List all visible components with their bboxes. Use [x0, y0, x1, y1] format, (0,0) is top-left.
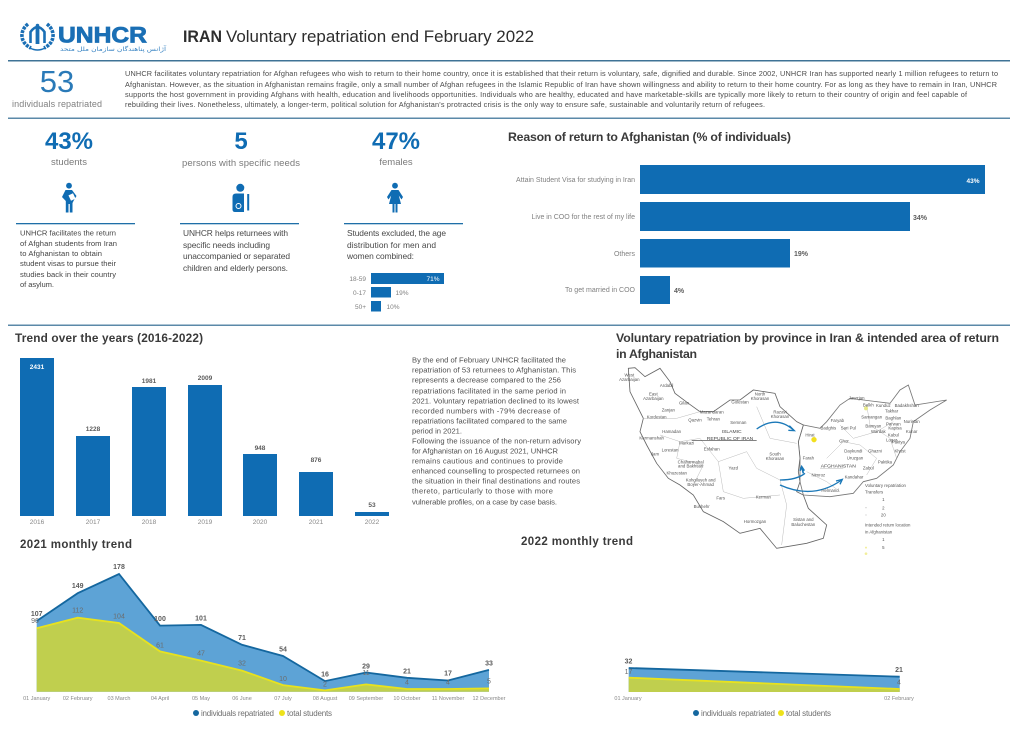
area chart: 2021 monthly trend: 04 April [151, 696, 169, 702]
bar chart: trend 2016-2022: 2020 [253, 519, 268, 526]
bar chart: trend 2016-2022: 1228 [86, 426, 101, 433]
map: province labels: Badakhshan [895, 403, 919, 408]
map: province labels: Nuristan [904, 419, 920, 424]
bar chart: trend 2016-2022: 2017 [86, 519, 101, 526]
stat: 43% students: students [51, 157, 87, 168]
area chart: 2021 monthly trend: 54 [279, 646, 287, 654]
map: province labels: Kordestan [647, 415, 667, 420]
bar chart: reason of return: 43% [966, 178, 980, 185]
heading: trend over the years: Trend over the years (2016-2022) [15, 331, 203, 345]
text: students description: to Afghanistan to obtain [20, 249, 102, 258]
heading: map: in Afghanistan [616, 347, 697, 361]
text block: trend narrative: recorded numbers with -79% decrease of [412, 406, 561, 416]
area chart: 2021 monthly trend: 33 [485, 660, 493, 668]
map: country labels: REPUBLIC OF IRAN [707, 436, 754, 442]
map: province labels: Takhar [885, 408, 899, 413]
area chart: 2021 monthly trend: 07 July [274, 696, 292, 702]
text: students description: student visas to pursue their [20, 259, 116, 268]
map: province labels: Farah [803, 456, 815, 461]
map: province labels: West [624, 373, 635, 378]
area chart: 2022 monthly trend: 21 [895, 667, 903, 674]
bar chart: reason of return [516, 165, 985, 304]
area chart: 2021 monthly trend: 11 November [432, 696, 464, 702]
map: province labels: Badghis [821, 426, 836, 431]
bar chart: age distribution: 18-59 [349, 276, 366, 283]
map: country labels: ISLAMIC [722, 429, 742, 435]
text: students description: UNHCR facilitates the return [20, 228, 116, 238]
text: age distribution intro: distribution for men and [347, 240, 436, 250]
intro paragraph: Afghanistan. However, as the situation in Afghanistan remains fragile, only a small number of Afghan refugees in the Islamic Republic of Iran have shown willingness and ability to return to their home country. For as long as they have to remain in Iran, UNHCR [125, 80, 997, 89]
map legend: 1 [882, 497, 885, 502]
headline figure: individuals repatriated: 53 [40, 64, 74, 99]
bar chart: reason of return: 4% [674, 288, 685, 295]
area chart: 2021 monthly trend: 32 [238, 660, 246, 668]
bar chart: age distribution: 19% [395, 290, 409, 297]
text block: trend narrative: repatriation of 53 returnees to Afghanistan. This [412, 366, 576, 374]
map: province labels: Logar [886, 438, 898, 443]
bar chart: reason of return: Attain Student Visa for studying in Iran [516, 177, 635, 184]
area chart: 2021 monthly trend: 21 [403, 668, 411, 676]
map: province labels [619, 373, 920, 527]
map: province labels: Parwan [886, 422, 901, 427]
area chart: 2021 monthly trend: 02 February [63, 696, 93, 702]
area chart: 2021 monthly trend: 149 [72, 583, 84, 590]
text block: trend narrative: enhanced counselling to prospected returnees on [412, 466, 580, 476]
bar chart: age distribution: 10% [386, 304, 400, 311]
text: specific needs description [183, 228, 290, 273]
text block: trend narrative: Following the issuance of the non-return advisory [412, 436, 581, 446]
map: province labels: Hormozgan [744, 519, 767, 524]
stat: 43% students [45, 128, 93, 168]
title: Voluntary repatriation end February 2022 [226, 27, 534, 46]
map: province labels: Sistan and [793, 517, 814, 522]
map: province labels: Kerman [756, 495, 772, 500]
panel: persons with specific needs [180, 128, 300, 273]
map: province labels: Esfahan [704, 446, 720, 451]
text block: trend narrative: repatriations facilitated compared to the same [412, 416, 567, 426]
map: country labels: AFGHANISTAN [821, 464, 856, 470]
map: province labels: Kunar [906, 429, 918, 434]
area chart: 2021 monthly trend: 03 March [108, 696, 130, 702]
area chart: 2021 monthly trend: 10 [279, 676, 287, 683]
map: province labels: Sari Pul [841, 426, 856, 431]
area chart: 2021 monthly trend: 16 [321, 672, 329, 678]
map: province labels: Khost [894, 448, 906, 453]
text block: trend narrative: represents a decrease compared to the 256 [412, 376, 561, 384]
stat: 5 persons with specific needs: persons with specific needs [182, 158, 300, 169]
bar chart: age distribution: 50+ [355, 304, 366, 311]
map: province labels: Helmand [821, 488, 839, 493]
map: province labels: Paktya [892, 440, 906, 445]
text block: trend narrative: 2021. Voluntary repatriation declined to its lowest [412, 396, 580, 406]
bar chart: trend 2016-2022 [20, 358, 389, 526]
area chart: 2022 monthly trend: 02 February [884, 696, 914, 702]
bar chart: trend 2016-2022: 2018 [142, 519, 157, 526]
heading: reason of return: Reason of return to Afghanistan (% of individuals) [508, 130, 791, 144]
map: province boundaries [643, 405, 897, 545]
headline figure: individuals repatriated [12, 64, 102, 109]
map: province labels: Wardak [871, 429, 887, 434]
map legend: Transfers [865, 490, 883, 495]
map legend: 2 [882, 505, 885, 510]
map: province labels: South [769, 452, 781, 457]
area chart: 2021 monthly trend: 05 May [192, 696, 210, 702]
map: province labels: Boyer-Ahmad [687, 482, 714, 487]
map: province labels: North [755, 392, 766, 397]
panel: females [344, 128, 463, 312]
map legend: Voluntary repatriation [865, 483, 906, 488]
legend: 2022 chart: total students [786, 709, 831, 718]
bar chart: trend 2016-2022: 948 [255, 445, 266, 452]
bar chart: trend 2016-2022: 2021 [309, 519, 324, 526]
area chart: 2021 monthly trend: 112 [72, 608, 83, 614]
bar chart: age distribution [349, 273, 444, 312]
text block: trend narrative: for Afghanistan on 16 August 2021, UNHCR [412, 446, 559, 456]
bar chart: trend 2016-2022: 1981 [142, 378, 157, 385]
map: province labels: Bamyan [865, 423, 882, 428]
area chart: 2021 monthly trend [23, 564, 506, 718]
bar chart: trend 2016-2022: 2431 [30, 364, 45, 371]
map: province labels: Mazandaran [700, 410, 724, 415]
map: province labels: Golestan [731, 400, 749, 405]
icon: UNHCR emblem [22, 24, 53, 50]
area chart: 2021 monthly trend: 5 [487, 678, 491, 686]
map: province labels: Kunduz [876, 403, 891, 408]
map: province labels: Zanjan [662, 407, 676, 412]
area chart: 2021 monthly trend: 96 [31, 618, 39, 625]
map: province labels: Tehran [707, 417, 721, 422]
map: country labels [707, 429, 856, 470]
bar chart: age distribution: 71% [426, 276, 440, 283]
area chart: 2022 monthly trend: 01 January [614, 696, 642, 702]
bar chart: reason of return: 34% [913, 215, 928, 222]
text block: trend narrative: repatriations facilitated in the same period in [412, 386, 566, 396]
bar chart: trend 2016-2022: 876 [311, 457, 322, 464]
intro paragraph: supports the host government in providing Afghans with health, education and livelihoods opportunities. Individuals who are healthy, educated and have marketable-skills are typically more likely to return to their country of origin and feel capable of [125, 90, 968, 99]
area chart: 2021 monthly trend: 06 June [232, 696, 252, 702]
bar chart: reason of return: To get married in COO [565, 287, 636, 294]
text: age distribution intro [346, 228, 446, 261]
map: province labels: Kabul [888, 432, 899, 437]
map: Iran outline [628, 368, 827, 548]
text: specific needs description: unaccompanied or separated [183, 251, 290, 261]
stat: 5 persons with specific needs [182, 128, 300, 169]
area chart: 2021 monthly trend: 29 [362, 664, 370, 670]
icon: female figure [387, 183, 403, 212]
map: province labels: Chaharmahal [678, 459, 704, 464]
map legend: 20 [881, 513, 886, 518]
area chart: 2021 monthly trend: 10 October [393, 696, 421, 702]
icon: person with specific needs [232, 184, 249, 212]
map: province labels: Daykundi [844, 448, 862, 453]
map: province labels: Azarbaijan [619, 377, 640, 382]
text: specific needs description: UNHCR helps returnees with [183, 228, 288, 238]
stat: 47% females: 47% [372, 128, 420, 155]
text block: trend narrative: vulnerable profiles, on a case by case basis. [412, 498, 557, 506]
area chart: 2022 monthly trend [614, 658, 914, 718]
legend: 2021 chart [193, 709, 332, 718]
text block: trend narrative: remains cautious and continues to provide [412, 456, 563, 466]
map legend [865, 483, 911, 555]
area chart: 2021 monthly trend: 47 [197, 650, 205, 658]
text block: trend narrative: period in 2021. [412, 426, 462, 436]
bar chart: reason of return: Live in COO for the rest of my life [532, 214, 635, 221]
area chart: 2021 monthly trend: 4 [405, 680, 409, 686]
map: province labels: Paktika [878, 460, 893, 465]
map: province labels: Gilan [679, 401, 690, 406]
area chart: 2021 monthly trend: 61 [156, 642, 164, 650]
map: province labels: Semnan [730, 420, 747, 425]
area chart: 2021 monthly trend: 08 August [313, 696, 338, 702]
heading: map [616, 331, 999, 361]
map: province labels: Khorasan [771, 414, 790, 419]
map legend: in Afghanistan [865, 530, 893, 535]
map: province labels: and Bakhtiari [678, 464, 703, 469]
map: province labels: Samangan [861, 415, 883, 420]
map: province labels: Fars [716, 496, 725, 501]
map: province labels: Zabul [863, 466, 874, 471]
stat: 47% females: females [379, 157, 413, 168]
bar chart: trend 2016-2022: 53 [368, 502, 376, 509]
map: province labels: Faryab [831, 418, 845, 423]
stat: 5 persons with specific needs: 5 [234, 128, 248, 155]
map: province labels: Baghlan [885, 416, 902, 421]
map legend: 5 [882, 545, 885, 550]
text block: trend narrative: By the end of February UNHCR facilitated the [412, 356, 566, 364]
map legend: Intended return location [865, 522, 911, 527]
map: province labels: Azarbaijan [643, 396, 664, 401]
area chart: 2021 monthly trend: 01 January [23, 696, 51, 702]
area chart: 2021 monthly trend: 104 [113, 614, 125, 620]
heading: 2021 monthly trend: 2021 monthly trend [20, 539, 132, 551]
stat: 47% females [372, 128, 420, 168]
map: province labels: Kandahar [845, 474, 864, 479]
map: province labels: Razavi [773, 410, 787, 415]
legend: 2022 chart: individuals repatriated [701, 709, 775, 718]
logo Persian tagline: آژانس پناهندگان سازمان ملل متحد [60, 44, 166, 53]
arrow: Iran to Afghanistan flows [757, 422, 842, 491]
area chart: 2021 monthly trend: 12 December [472, 696, 506, 702]
text: age distribution intro: women combined: [346, 251, 414, 261]
text: specific needs description: children and elderly persons. [183, 263, 288, 273]
map: province labels: Baluchestan [791, 522, 816, 527]
map: province labels: Markazi [679, 441, 694, 446]
intro paragraph [125, 69, 998, 109]
panel: students [16, 128, 135, 289]
logo wordmark: UNHCR [58, 22, 147, 48]
map: province labels: Yazd [729, 466, 739, 471]
area chart: 2022 monthly trend: 32 [625, 658, 632, 666]
map: province labels: Hamadan [662, 429, 682, 434]
area chart: 2022 monthly trend: 4 [897, 680, 901, 686]
legend: 2021 chart: individuals repatriated [201, 709, 274, 718]
map: province labels: Lorestan [662, 447, 679, 452]
UNHCR logo [22, 22, 166, 53]
map: province labels: Kohgiluyeh and [686, 478, 716, 483]
heading: map: Voluntary repatriation by province in Iran & intended area of return [616, 331, 999, 345]
intro paragraph: UNHCR facilitates voluntary repatriation for Afghan refugees who wish to return to their home country, once it is established that their return is voluntary, safe, dignified and durable. Since 2002, UNHCR Iran has supported nearly 1 million refugees to return to [125, 69, 998, 78]
bar chart: trend 2016-2022: 2019 [198, 519, 213, 526]
map: province labels: Jawzjan [849, 396, 865, 401]
area chart: 2021 monthly trend: 71 [238, 635, 246, 642]
area chart: 2021 monthly trend: 2 [323, 682, 327, 688]
intro paragraph: rebuilding their lives. Nonetheless, ultimately, a longer-term, political solution for Afghanistan's protracted crisis is the only way to ensure safe, sustainable and voluntarily return of refugees. [125, 100, 765, 109]
map: Afghanistan outline [798, 385, 947, 497]
map: province labels: Ardabil [660, 383, 673, 388]
text: specific needs description: specific needs including [183, 240, 270, 250]
map: province labels: Kermanshah [639, 436, 665, 441]
text: students description: of Afghan students from Iran [20, 239, 117, 248]
area chart: 2021 monthly trend: 17 [444, 670, 452, 678]
stat: 43% students: 43% [45, 128, 93, 155]
map: province labels: East [649, 392, 658, 397]
area chart: 2022 monthly trend: 17 [625, 669, 632, 676]
bar chart: trend 2016-2022: 2022 [365, 519, 380, 526]
map: province labels: Khorasan [766, 456, 785, 461]
map: province labels: Kapisa [888, 426, 902, 431]
map: province labels: Ilam [651, 451, 659, 456]
bar chart: trend 2016-2022: 2016 [30, 519, 45, 526]
text block: trend narrative [412, 356, 581, 506]
text block: trend narrative: the situation in their final destinations and routes [412, 476, 580, 486]
map: province labels: Khorasan [751, 396, 770, 401]
map: province labels: Hirat [805, 432, 815, 437]
map: province labels: Khuzestan [666, 471, 687, 476]
headline figure: individuals repatriated: individuals repatriated [12, 99, 102, 109]
bar chart: reason of return: 19% [794, 251, 809, 258]
map: province labels: Bushehr [694, 504, 710, 509]
text: students description: of asylum. [20, 280, 54, 289]
icon: student with book [62, 183, 76, 212]
map: highlighted locations [811, 406, 868, 442]
map legend: 1 [882, 537, 885, 542]
map: province labels: Ghazni [868, 448, 882, 453]
area chart: 2021 monthly trend: 101 [195, 616, 207, 622]
map: province labels: Uruzgan [847, 456, 864, 461]
text block: trend narrative: thereto, particularly to those with more [412, 486, 553, 496]
area chart: 2021 monthly trend: 09 September [349, 696, 383, 702]
bar chart: trend 2016-2022: 2009 [198, 375, 213, 382]
title: IRAN [183, 27, 222, 46]
area chart: 2021 monthly trend: 178 [113, 564, 125, 571]
heading: 2022 monthly trend: 2022 monthly trend [521, 536, 633, 548]
map: province labels: Ghor [839, 438, 849, 443]
bar chart: age distribution: 0-17 [353, 290, 366, 297]
legend: 2022 chart [693, 709, 831, 718]
map: province labels: Balkh [863, 402, 874, 407]
text: age distribution intro: Students excluded, the age [347, 228, 446, 238]
area chart: 2021 monthly trend: 100 [154, 616, 166, 623]
map: Iran and Afghanistan [619, 368, 947, 555]
area chart: 2021 monthly trend: 4 [446, 680, 450, 686]
text: students description: studies back in their country [20, 270, 116, 279]
map: province labels: Qazvin [688, 417, 702, 422]
map: province labels: Nimroz [811, 472, 825, 477]
text: students description [20, 228, 117, 289]
area chart: 2021 monthly trend: 11 [362, 670, 370, 677]
bar chart: reason of return: Others [614, 251, 635, 258]
area chart: 2021 monthly trend: 107 [31, 611, 43, 618]
legend: 2021 chart: total students [287, 709, 332, 718]
